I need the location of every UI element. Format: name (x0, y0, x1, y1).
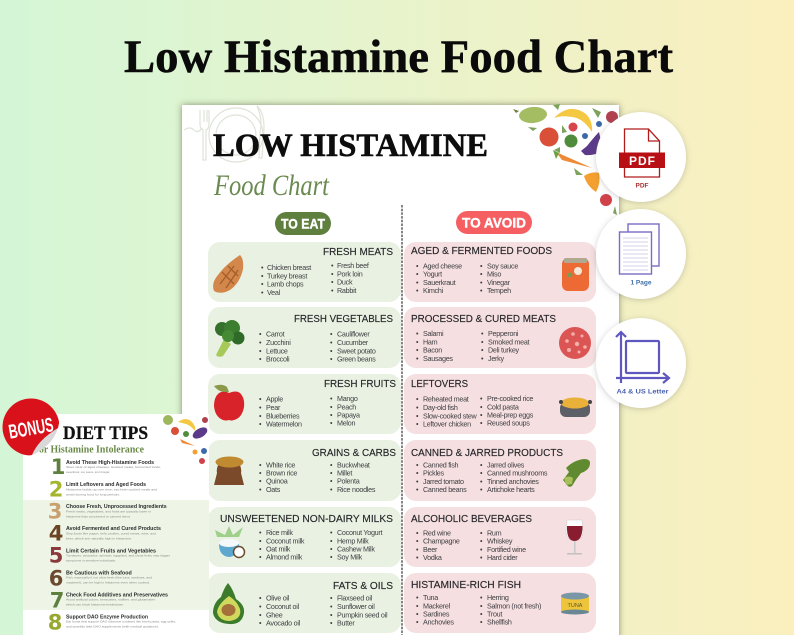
list: column one: Avocado oil (266, 618, 301, 627)
list: column two: Trout (487, 610, 502, 619)
list: column two: Vinegar (487, 278, 511, 287)
list: column two: • (480, 278, 483, 287)
icon: PDF document: PDF (629, 154, 655, 168)
list: column two: Cauliflower (337, 330, 370, 339)
list: column one: • (259, 420, 262, 429)
tip 7 (50, 588, 168, 612)
list: column one: Oat milk (266, 544, 291, 553)
list: column two: Fortified wine (487, 545, 526, 554)
list: column two: • (331, 278, 334, 287)
list: column two: • (481, 354, 484, 363)
card: aged and fermented foods (404, 242, 596, 302)
list: column one: • (416, 469, 419, 478)
list: column one: • (416, 354, 419, 363)
list: column one: Day-old fish (423, 403, 458, 412)
tip 3: Fresh meats, vegetables, and fruits are typically lower in (66, 509, 151, 513)
tip 1: Avoid These High-Histamine Foods (66, 460, 154, 466)
list: column two: • (480, 402, 483, 411)
icon: pickles (563, 459, 590, 487)
list: column one: • (416, 346, 419, 355)
list: column one: • (259, 485, 262, 494)
list: column one: Canned beans (423, 485, 467, 494)
list: column two: • (330, 394, 333, 403)
list: column one: • (416, 528, 419, 537)
list: column one: • (416, 610, 419, 619)
list: column two: • (330, 460, 333, 469)
list: column two: Tinned anchovies (487, 477, 539, 486)
tip 4: 4 (49, 522, 63, 546)
list: column two: • (480, 477, 483, 486)
list: column two: • (480, 419, 483, 428)
icon: red apple (214, 385, 244, 420)
list: column two: • (480, 485, 483, 494)
tip 5: Tomatoes, avocados, spinach, eggplant, and citrus fruits may trigger (66, 554, 170, 558)
tip 2 (49, 478, 157, 502)
tip 1: sauerkraut, soy sauce, and vinegar. (66, 470, 110, 474)
list: column two: • (480, 553, 483, 562)
tip 6: Be Cautious with Seafood (66, 570, 132, 576)
list: column two: • (330, 411, 333, 420)
icon: coconut milk (215, 526, 244, 558)
tip 8 (48, 610, 176, 634)
list: column two: • (330, 402, 333, 411)
badge: to eat: TO EAT (281, 216, 325, 232)
icon: wine glass (566, 520, 583, 554)
list: column two: • (480, 537, 483, 546)
badge label: A4 & US Letter (616, 388, 669, 396)
list: column one: • (416, 537, 419, 546)
list: column one: • (259, 355, 262, 364)
list: column one: Brown rice (266, 469, 297, 478)
list: column one: Almond milk (266, 553, 303, 562)
list: column one: • (416, 618, 419, 627)
list: column one: Zucchini (266, 338, 291, 347)
list: column one: • (259, 330, 262, 339)
list: column two: Meal-prep eggs (487, 411, 534, 420)
list: column two: • (480, 469, 483, 478)
list: column two: Cold pasta (487, 402, 519, 411)
list: column one: Lamb chops (267, 280, 304, 289)
icon: tuna can: TUNA (568, 603, 583, 609)
list: column two: • (330, 419, 333, 428)
list: column one: • (259, 528, 262, 537)
list: column one: • (259, 477, 262, 486)
list: column two: • (480, 286, 483, 295)
badge: to avoid: TO AVOID (462, 214, 526, 230)
card heading: FRESH FRUITS (324, 378, 396, 390)
tip 3 (48, 500, 167, 524)
list: column one: • (261, 263, 264, 272)
tip 3: 3 (48, 500, 62, 524)
icon: pepperoni (559, 327, 591, 359)
list: column one: • (259, 553, 262, 562)
list: column one: Carrot (266, 330, 285, 339)
list: column one: Pear (266, 403, 281, 412)
list: column one: • (416, 261, 419, 270)
tip 8: 8 (48, 610, 62, 634)
icon: tuna can (561, 592, 589, 614)
list: column one: • (259, 338, 262, 347)
list: column two: Pepperoni (488, 329, 519, 338)
icon: avocado (213, 583, 244, 624)
list: column two: • (480, 411, 483, 420)
panel: chart sheet (182, 104, 619, 635)
card: processed and cured meats (404, 307, 596, 368)
list: column one: Slow-cooked stew (423, 411, 478, 420)
list: column one: Yogurt (423, 270, 442, 279)
card heading: FATS & OILS (333, 580, 393, 592)
list: column two: Butter (337, 618, 355, 627)
list: column two: Deli turkey (488, 346, 520, 355)
list: column two: Buckwheat (337, 460, 370, 469)
list: column one: Sausages (423, 354, 453, 363)
list: column two: Peach (337, 402, 356, 411)
list: column two: • (330, 610, 333, 619)
list: column two: • (481, 337, 484, 346)
list: column two: • (480, 270, 483, 279)
card: histamine-rich fish (404, 573, 596, 633)
card heading: UNSWEETENED NON-DAIRY MILKS (220, 513, 393, 525)
list: column one: Beer (423, 545, 438, 554)
sheet heading: LOW HISTAMINE (213, 128, 488, 164)
icon: broccoli (215, 320, 244, 357)
list: column one: Sardines (423, 610, 450, 619)
icon: paper size axes (616, 332, 669, 383)
tip 1: 1 (51, 455, 65, 479)
list: column one: • (416, 403, 419, 412)
list: column two: Pumpkin seed oil (337, 610, 388, 619)
card heading: AGED & FERMENTED FOODS (411, 245, 552, 257)
list: column two: • (480, 593, 483, 602)
list: column one: Leftover chicken (423, 420, 471, 429)
badge: to eat (275, 212, 331, 235)
list: column one: Watermelon (266, 420, 302, 429)
list: column one: Red wine (423, 528, 451, 537)
list: column two: • (330, 338, 333, 347)
list: column one: • (416, 329, 419, 338)
list: column one: White rice (266, 460, 295, 469)
tips subheading: or Histamine Intolerance (39, 444, 145, 456)
card: grains and carbs (208, 440, 401, 501)
list: column two: • (330, 485, 333, 494)
tip 8: and possibly take DAO supplements (with medical guidance). (66, 625, 159, 629)
list: column one: Veal (267, 288, 281, 297)
tip 5: 5 (49, 544, 63, 568)
card: leftovers (404, 374, 596, 434)
list: column two: • (331, 269, 334, 278)
list: column two: Smoked meat (488, 337, 530, 346)
list: column two: Miso (487, 270, 501, 279)
list: column one: Apple (266, 395, 283, 404)
list: column two: • (330, 469, 333, 478)
list: column one: • (259, 544, 262, 553)
list: column one: • (416, 278, 419, 287)
list: column two: • (330, 355, 333, 364)
tip 3: Choose Fresh, Unprocessed Ingredients (66, 504, 167, 510)
panel: page count badge (596, 209, 686, 299)
tip 1: Steer clear of aged cheeses, smoked meats, fermented foods, (66, 465, 161, 469)
list: column two: Hard cider (487, 553, 518, 562)
list: column one: • (416, 411, 419, 420)
list: column one: • (259, 602, 262, 611)
list: column one: Bacon (423, 346, 442, 355)
list: column one: • (416, 286, 419, 295)
icon: plate and cutlery (184, 106, 264, 162)
tip 6: Fish, especially if not ultra-fresh (like tuna, sardines, and (66, 576, 152, 580)
list: column one: Champagne (423, 537, 460, 546)
list: column two: Pre-cooked rice (487, 394, 533, 403)
list: column two: Tempeh (487, 286, 511, 295)
list: column one: • (416, 593, 419, 602)
list: column one: Quinoa (266, 477, 288, 486)
list: column two: Cucumber (337, 338, 369, 347)
list: column one: Blueberries (266, 411, 300, 420)
icon: grilled chicken (213, 255, 243, 293)
icon: pages (620, 224, 659, 274)
list: column one: Sauerkraut (423, 278, 456, 287)
list: column two: Pork loin (337, 269, 363, 278)
icon: grain sack (214, 456, 244, 485)
list: column two: • (480, 394, 483, 403)
tip 6 (49, 566, 152, 590)
list: column two: Duck (337, 278, 353, 287)
list: column one: • (259, 618, 262, 627)
tip 7: 7 (50, 588, 64, 612)
list: column one: Tuna (423, 593, 438, 602)
tip 5: symptoms in sensitive individuals. (66, 559, 116, 563)
card: fresh meats (208, 242, 401, 302)
badge label: PDF (636, 182, 649, 190)
list: column one: • (259, 610, 262, 619)
list: column two: Artichoke hearts (487, 485, 535, 494)
tips heading: DIET TIPS (63, 423, 148, 444)
bonus sticker: BONUS (7, 414, 55, 444)
list: column one: Reheated meat (423, 395, 469, 404)
tip 3: histamine than processed or canned items. (66, 514, 131, 518)
list: column one: Mackerel (423, 601, 451, 610)
tip 4: beer, which are naturally high in histamine. (66, 536, 132, 540)
card heading: CANNED & JARRED PRODUCTS (411, 447, 563, 459)
list: column one: Aged cheese (423, 261, 462, 270)
list: column two: Cashew Milk (337, 544, 375, 553)
card heading: HISTAMINE-RICH FISH (411, 579, 521, 591)
tip 1 (51, 455, 161, 479)
list: column one: Vodka (423, 553, 442, 562)
list: column one: Ham (423, 337, 438, 346)
list: column two: • (330, 594, 333, 603)
list: column two: Sweet potato (337, 346, 376, 355)
badge: to avoid (456, 211, 532, 234)
icon: kimchi jar (562, 258, 589, 291)
sheet subheading: Food Chart (213, 169, 330, 202)
list: column one: Rice milk (266, 528, 293, 537)
main title: Low Histamine Food Chart (124, 31, 673, 83)
tip 2: Histamine builds up over time; eat fresh-cooked meals and (66, 487, 157, 491)
list: column two: Melon (337, 419, 355, 428)
list: column two: Sunflower oil (337, 602, 375, 611)
list: column two: Jerky (488, 354, 504, 363)
list: column one: Broccoli (266, 355, 290, 364)
tip 7: Check Food Additives and Preservatives (66, 592, 168, 598)
bonus sticker (2, 398, 60, 456)
list: column two: Soy Milk (337, 553, 363, 562)
list: column two: Jarred olives (487, 460, 525, 469)
list: column one: Salami (423, 329, 444, 338)
card heading: FRESH MEATS (323, 246, 393, 258)
list: column two: • (480, 610, 483, 619)
list: column one: Coconut oil (266, 602, 300, 611)
list: column two: Rabbit (337, 286, 356, 295)
list: column one: • (259, 395, 262, 404)
list: column one: Olive oil (266, 594, 290, 603)
list: column two: Coconut Yogurt (337, 528, 383, 537)
list: column two: Mango (337, 394, 358, 403)
tip 7: Avoid artificial colors, benzoates, sulfites, and glutamates (66, 598, 156, 602)
list: column one: • (416, 477, 419, 486)
list: column one: Lettuce (266, 346, 288, 355)
tip 8: Support DAO Enzyme Production (66, 614, 148, 620)
list: column two: • (481, 329, 484, 338)
list: column two: • (480, 618, 483, 627)
list: column two: • (330, 477, 333, 486)
list: column two: Fresh beef (337, 261, 369, 270)
list: column one: Coconut milk (266, 536, 305, 545)
list: column two: • (480, 460, 483, 469)
tip 7: which can block histamine breakdown. (66, 603, 124, 607)
list: column two: • (330, 330, 333, 339)
list: column one: Chicken breast (267, 263, 311, 272)
panel: paper size badge (596, 318, 686, 408)
card heading: ALCOHOLIC BEVERAGES (411, 513, 532, 525)
card heading: FRESH VEGETABLES (294, 313, 393, 325)
list: column two: Rice noodles (337, 485, 376, 494)
list: column one: • (416, 420, 419, 429)
tip 4 (49, 522, 161, 546)
list: column two: • (330, 346, 333, 355)
list: column two: • (330, 553, 333, 562)
list: column one: • (259, 411, 262, 420)
list: column two: • (330, 544, 333, 553)
list: column one: • (261, 288, 264, 297)
tip 4: Skip foods like yogurt, kefir, pickles, cured meats, wine, and (66, 531, 156, 535)
list: column one: Ghee (266, 610, 283, 619)
list: column two: • (481, 346, 484, 355)
list: column one: • (259, 536, 262, 545)
illustration: tips sheet fruit corner (163, 415, 209, 464)
list: column two: • (331, 286, 334, 295)
list: column two: • (480, 545, 483, 554)
list: column one: • (261, 271, 264, 280)
list: column one: • (416, 460, 419, 469)
list: column two: Millet (337, 469, 352, 478)
list: column one: • (416, 395, 419, 404)
list: column two: Hemp Milk (337, 536, 369, 545)
list: column two: Shellfish (487, 618, 512, 627)
list: column one: • (416, 545, 419, 554)
illustration: fruit and vegetable corner (513, 104, 618, 215)
icon: cooking pot (559, 398, 592, 417)
tip 2: avoid storing food for long periods. (66, 492, 120, 496)
card heading: LEFTOVERS (411, 378, 468, 390)
badge label: 1 Page (631, 280, 652, 286)
card: fresh fruits (208, 374, 401, 434)
list: column one: Jarred tomato (423, 477, 464, 486)
list: column one: • (261, 280, 264, 289)
divider (401, 205, 403, 635)
list: column one: • (259, 346, 262, 355)
list: column two: Herring (487, 593, 509, 602)
card: canned and jarred products (404, 440, 596, 501)
tip 6: mackerel), can be high in histamine even when cooked. (66, 581, 150, 585)
card heading: PROCESSED & CURED MEATS (411, 313, 556, 325)
list: column one: Pickles (423, 469, 444, 478)
panel: bonus diet tips sheet (23, 414, 209, 635)
list: column two: • (480, 261, 483, 270)
list: column one: • (416, 601, 419, 610)
tip 2: Limit Leftovers and Aged Foods (66, 482, 146, 488)
list: column two: • (330, 618, 333, 627)
sticker page curl (32, 428, 58, 455)
list: column two: Polenta (337, 477, 360, 486)
list: column two: • (330, 528, 333, 537)
list: column two: • (480, 528, 483, 537)
list: column one: • (259, 460, 262, 469)
list: column two: Canned mushrooms (487, 469, 548, 478)
list: column two: • (480, 601, 483, 610)
list: column one: Anchovies (423, 618, 454, 627)
list: column two: • (330, 536, 333, 545)
list: column two: Rum (487, 528, 502, 537)
card: fats and oils (208, 573, 401, 633)
list: column two: Papaya (337, 411, 360, 420)
tip 6: 6 (49, 566, 63, 590)
list: column one: Turkey breast (267, 271, 307, 280)
tip 8: Eat foods that support DAO (diamine oxidase) like fresh pasta, egg yolks, (66, 620, 176, 624)
list: column two: Soy sauce (487, 261, 518, 270)
card heading: GRAINS & CARBS (312, 447, 396, 459)
list: column one: • (259, 594, 262, 603)
list: column two: Salmon (not fresh) (487, 601, 541, 610)
list: column one: • (416, 485, 419, 494)
list: column two: • (331, 261, 334, 270)
list: column two: Green beans (337, 355, 376, 364)
list: column one: Kimchi (423, 286, 444, 295)
list: column two: • (330, 602, 333, 611)
list: column one: • (416, 553, 419, 562)
list: column one: Oats (266, 485, 281, 494)
tip 5: Limit Certain Fruits and Vegetables (66, 548, 156, 554)
tip 4: Avoid Fermented and Cured Products (66, 526, 161, 532)
tip 2: 2 (49, 478, 63, 502)
list: column one: • (259, 403, 262, 412)
list: column two: Reused soups (487, 419, 530, 428)
panel: PDF badge (596, 112, 686, 202)
card: alcoholic beverages (404, 507, 596, 567)
list: column two: Whiskey (487, 537, 513, 546)
list: column two: Flaxseed oil (337, 594, 373, 603)
list: column one: • (259, 469, 262, 478)
card: non-dairy milks (208, 507, 401, 567)
list: column one: • (416, 270, 419, 279)
tip 5 (49, 544, 170, 568)
list: column one: Canned fish (423, 460, 459, 469)
card: fresh vegetables (208, 307, 401, 368)
list: column one: • (416, 337, 419, 346)
